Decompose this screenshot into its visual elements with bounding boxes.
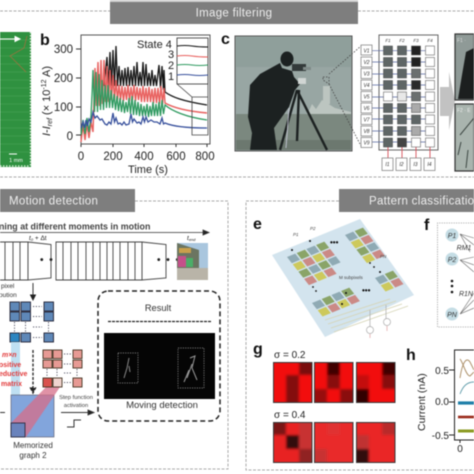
filtered image F1: F1 · (457, 38, 466, 44)
panel e: crossbar device (253, 216, 414, 338)
heading: image filtering: Image filtering (196, 8, 272, 20)
voltage inputs: V5 (363, 94, 370, 100)
panel c: image filter array (221, 31, 474, 171)
x axis title: Time (s) (128, 164, 168, 176)
current outputs: I3 (413, 162, 418, 168)
tick labels: 0.0 (435, 397, 449, 408)
red band (458, 416, 474, 418)
panel e: crossbar device: P1 (293, 232, 299, 237)
filtered image F2: F2 · E (457, 108, 471, 114)
memorized graph label: graph 2 (19, 451, 47, 460)
dotted frame (438, 223, 474, 327)
step glyph (67, 420, 81, 427)
heading: image filtering (110, 0, 358, 24)
scanning title: ning at different moments in motion (0, 222, 150, 232)
subpixel block 3 (312, 288, 360, 317)
current outputs (382, 158, 435, 170)
cameraman photo (235, 36, 352, 151)
panel h: current chart (406, 347, 474, 455)
olive band (458, 430, 474, 432)
tick labels: -0.5 (432, 431, 449, 442)
filtered image F1 (455, 34, 474, 100)
crossbar array: F1 (385, 38, 391, 43)
current outputs: I1 (385, 162, 390, 168)
subpixel block 2 (345, 228, 385, 263)
voltage inputs: V1 (363, 48, 370, 54)
x axis: 600 (166, 151, 186, 163)
voltage inputs: V8 (363, 129, 370, 135)
crossbar array: F4 (427, 38, 433, 43)
panel letter f: f (424, 217, 430, 234)
heading: motion detection (0, 189, 135, 212)
voltage inputs: V3 (363, 72, 370, 78)
panel f: network diagram: RM1 (457, 245, 471, 252)
tick labels: 0.5 (435, 366, 449, 377)
arrow: to filtered images (440, 72, 455, 130)
arrow: frame to matrix (30, 283, 36, 300)
moving detection label: Moving detection (126, 400, 198, 411)
state legend: 1 (168, 71, 174, 83)
step function label: Step function (59, 395, 93, 401)
moving detection image (104, 333, 215, 399)
substrate (272, 219, 414, 337)
crossbar array: F3 (413, 38, 419, 43)
panel letter h: h (406, 347, 416, 364)
x tick: 0 (457, 444, 463, 455)
street photo (177, 243, 208, 280)
x axis: 200 (103, 151, 123, 163)
red matrix description: m×n (2, 352, 17, 359)
blue band (458, 401, 474, 405)
step function label (59, 395, 93, 409)
state legend: State 4 (137, 39, 172, 51)
memorized graph square (11, 342, 60, 437)
matrix ellipses (14, 306, 48, 338)
red matrix ellipses (47, 354, 77, 382)
panel f: network diagram: R1N (459, 291, 474, 298)
y axis: 300 (54, 44, 73, 56)
plot frame (81, 35, 210, 144)
step function label: activation (64, 403, 88, 409)
memorized graph label (13, 441, 53, 460)
red positive matrix (43, 350, 82, 387)
voltage inputs (361, 45, 372, 148)
time arrow (0, 230, 209, 235)
panel b: current versus time chart (40, 32, 215, 176)
x axis: 800 (195, 151, 215, 163)
memorized graph label: Memorized (13, 441, 53, 450)
state legend (137, 39, 174, 83)
time labels: + Δt (33, 235, 47, 242)
panel e: crossbar device: M subpixels (339, 275, 364, 280)
ellipsis: • • • (157, 255, 181, 266)
tick labels (432, 366, 454, 442)
panel a: green circuit board: 1 mm (9, 158, 23, 164)
sigma 0.4 label: σ = 0.4 (274, 410, 306, 421)
green series (81, 70, 207, 135)
heading: pattern classification (339, 189, 474, 212)
panel e: crossbar device: PN (380, 254, 387, 259)
y axis title: A) (41, 66, 53, 79)
subpixel block 4 (375, 271, 403, 292)
time labels: end (189, 237, 196, 242)
subpixel block 1 (287, 242, 346, 285)
zoom dashed leaders (323, 46, 361, 146)
plot frame (454, 350, 474, 440)
voltage inputs: V4 (363, 83, 370, 89)
panel letter e: e (253, 216, 262, 233)
sigma 0.2 label: σ = 0.2 (274, 350, 306, 361)
state legend: 3 (168, 49, 174, 61)
panel g: recalled pattern heatmaps (253, 341, 401, 469)
y axis: 200 (54, 73, 73, 85)
horizontal and vertical wires (372, 51, 434, 142)
y axis title: (× 10 (41, 90, 53, 118)
current outputs: I2 (399, 162, 404, 168)
panel letter c: c (221, 31, 230, 48)
red series (81, 60, 207, 142)
first frame stack (0, 242, 51, 280)
result box (98, 291, 220, 421)
inset (177, 38, 208, 135)
voltage inputs: V9 (363, 140, 370, 146)
state legend: 2 (168, 60, 174, 72)
panel letter b: b (40, 32, 50, 49)
voltage inputs: V6 (363, 106, 370, 112)
panel a: green circuit board (0, 32, 31, 167)
panel f: network diagram: P1 (448, 233, 456, 240)
x axis: 400 (134, 151, 154, 163)
tan curves (460, 359, 474, 378)
device dots and labels (291, 238, 381, 305)
panel letter g: g (253, 341, 263, 358)
time labels: 0 (31, 237, 34, 242)
result title: Result (145, 303, 172, 313)
arrow stub left (0, 412, 5, 414)
panel f: network diagram (424, 217, 474, 327)
current outputs: I4 (427, 162, 432, 168)
arrow: activation (61, 410, 94, 415)
y axis title: I-I (41, 126, 53, 136)
panel f: network diagram: P2 (448, 257, 456, 264)
y axis (54, 44, 81, 143)
time labels: t (29, 235, 31, 242)
voltage inputs: V2 (363, 60, 370, 66)
red matrix description: matrix (1, 381, 22, 388)
y axis: 100 (54, 102, 73, 114)
ammeters (366, 305, 390, 338)
device dots and labels: ••• (330, 238, 339, 247)
conductance matrix (10, 302, 54, 342)
ellipsis: • • • (40, 255, 64, 266)
heatmap row 2 (268, 417, 401, 469)
crossbar array (372, 35, 438, 158)
black series (104, 46, 207, 105)
time labels: t (187, 235, 189, 242)
pixel resolution label (0, 283, 17, 299)
blue series (81, 112, 207, 128)
second frame stack (56, 242, 166, 280)
y axis title: ref (47, 117, 54, 126)
y axis title: Current (nA) (416, 373, 428, 431)
x axis: 0 (78, 151, 84, 163)
red matrix description (0, 352, 28, 388)
heatmap row 1 (268, 357, 401, 409)
y axis title: -12 (41, 79, 48, 90)
crossbar array: F2 (399, 38, 405, 43)
panel e: crossbar device: P2 (310, 226, 316, 231)
filtered image F2 (455, 104, 474, 171)
heading: motion detection: Motion detection (9, 196, 98, 208)
x axis (78, 144, 215, 163)
neuron nodes (446, 228, 458, 320)
arrow: dashed down (30, 350, 36, 393)
time labels (29, 235, 196, 242)
panel f: network diagram: PN (447, 312, 458, 319)
pixel resolution label: pixel (1, 283, 15, 290)
wires bus (325, 299, 408, 332)
y axis: 0 (67, 131, 73, 143)
fan lines (460, 234, 474, 314)
voltage inputs: V7 (363, 118, 370, 124)
blue curve (460, 382, 474, 394)
panel d: motion detection flow (0, 222, 220, 460)
device dots and labels: ••• (362, 286, 371, 295)
